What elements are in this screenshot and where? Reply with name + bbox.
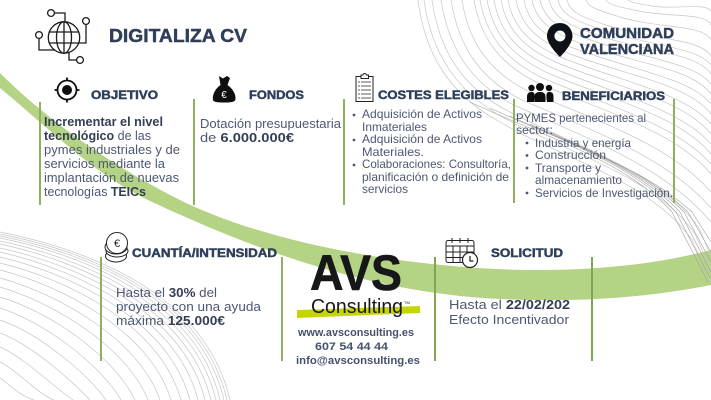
logo: AVS Consulting: TM	[404, 300, 410, 305]
text: fondos: de 6.000.000€	[200, 131, 294, 145]
panel: objetivo	[39, 78, 180, 205]
heading: beneficiarios: BENEFICIARIOS	[562, 91, 665, 103]
contact details: info@avsconsulting.es	[296, 355, 420, 367]
text: objetivo: tecnológico de las	[44, 129, 151, 143]
header icon: digital globe	[36, 10, 89, 63]
text: beneficiarios: PYMES pertenecientes al	[516, 112, 646, 125]
text: fondos	[200, 117, 341, 145]
text: solicitud: Efecto Incentivador	[449, 313, 569, 327]
text: fondos: Dotación presupuestaria	[200, 117, 341, 131]
text: beneficiarios: almacenamiento	[535, 174, 622, 187]
text: costes list	[353, 108, 511, 196]
logo: AVS Consulting: Consulting	[311, 296, 403, 318]
text: costes list: Adquisición de Activos	[362, 133, 482, 146]
text: objetivo	[44, 115, 180, 199]
contact details: www.avsconsulting.es	[297, 327, 414, 339]
contact details: 607 54 44 44	[315, 341, 389, 353]
icon: calendar and clock	[446, 238, 478, 268]
region label: VALENCIANA	[580, 42, 675, 58]
heading: cuantía: CUANTÍA/INTENSIDAD	[132, 247, 277, 260]
text: solicitud: Hasta el 22/02/202	[449, 298, 570, 312]
text: beneficiarios: sector:	[516, 124, 553, 137]
heading: objetivo: OBJETIVO	[91, 90, 158, 102]
heading: fondos: FONDOS	[249, 90, 304, 102]
logo: AVS Consulting	[297, 245, 420, 318]
heading: solicitud: SOLICITUD	[491, 248, 563, 260]
icon: coins: €	[114, 238, 120, 250]
logo: AVS Consulting: AVS	[310, 245, 402, 301]
text: objetivo: implantación de nuevas	[44, 171, 179, 185]
text: cuantía: Hasta el 30% del	[116, 286, 217, 300]
text: objetivo: pymes industriales y de	[44, 143, 180, 157]
panel: beneficiarios	[513, 83, 675, 203]
heading: costes elegibles: COSTES ELEGIBLES	[378, 90, 509, 102]
text: objetivo: Incrementar el nivel	[44, 115, 163, 129]
text: costes list: Adquisición de Activos	[362, 108, 482, 121]
text: costes list: planificación o definición de	[362, 171, 509, 184]
contact details	[296, 327, 420, 367]
panel: costes elegibles	[343, 74, 511, 205]
icon: people	[527, 83, 554, 102]
text: cuantía	[116, 286, 261, 328]
text: beneficiarios: Construcción	[535, 149, 606, 162]
text: costes list: servicios	[362, 183, 408, 196]
panel: solicitud	[434, 238, 593, 361]
green ribbon	[0, 73, 711, 300]
text: costes list: Inmateriales	[362, 121, 427, 134]
text: beneficiarios: Industria y energía	[535, 137, 632, 150]
text: beneficiarios: Transporte y	[535, 162, 601, 175]
text: objetivo: tecnologías TEICs	[44, 185, 146, 199]
text: cuantía: proyecto con una ayuda	[116, 300, 261, 314]
icon: clipboard	[356, 74, 373, 102]
text: objetivo: servicios mediante la	[44, 157, 165, 171]
text: beneficiarios: Servicios de Investigación.	[535, 187, 673, 200]
icon: location pin	[547, 23, 572, 57]
text: beneficiarios	[516, 112, 673, 200]
text: costes list: Materiales.	[362, 146, 424, 159]
icon: target	[54, 78, 80, 102]
region label: COMUNIDAD	[580, 26, 674, 42]
icon: coins	[105, 232, 128, 262]
icon: money bag	[213, 76, 236, 102]
region label	[580, 26, 675, 58]
text: cuantía: máxima 125.000€	[116, 314, 225, 328]
panel: fondos	[193, 76, 341, 205]
text: solicitud	[449, 298, 570, 327]
text: costes list: Colaboraciones: Consultoría,	[362, 158, 511, 171]
title: DIGITALIZA CV	[109, 25, 248, 46]
panel: cuantía	[100, 232, 283, 361]
icon: money bag: €	[221, 90, 227, 101]
